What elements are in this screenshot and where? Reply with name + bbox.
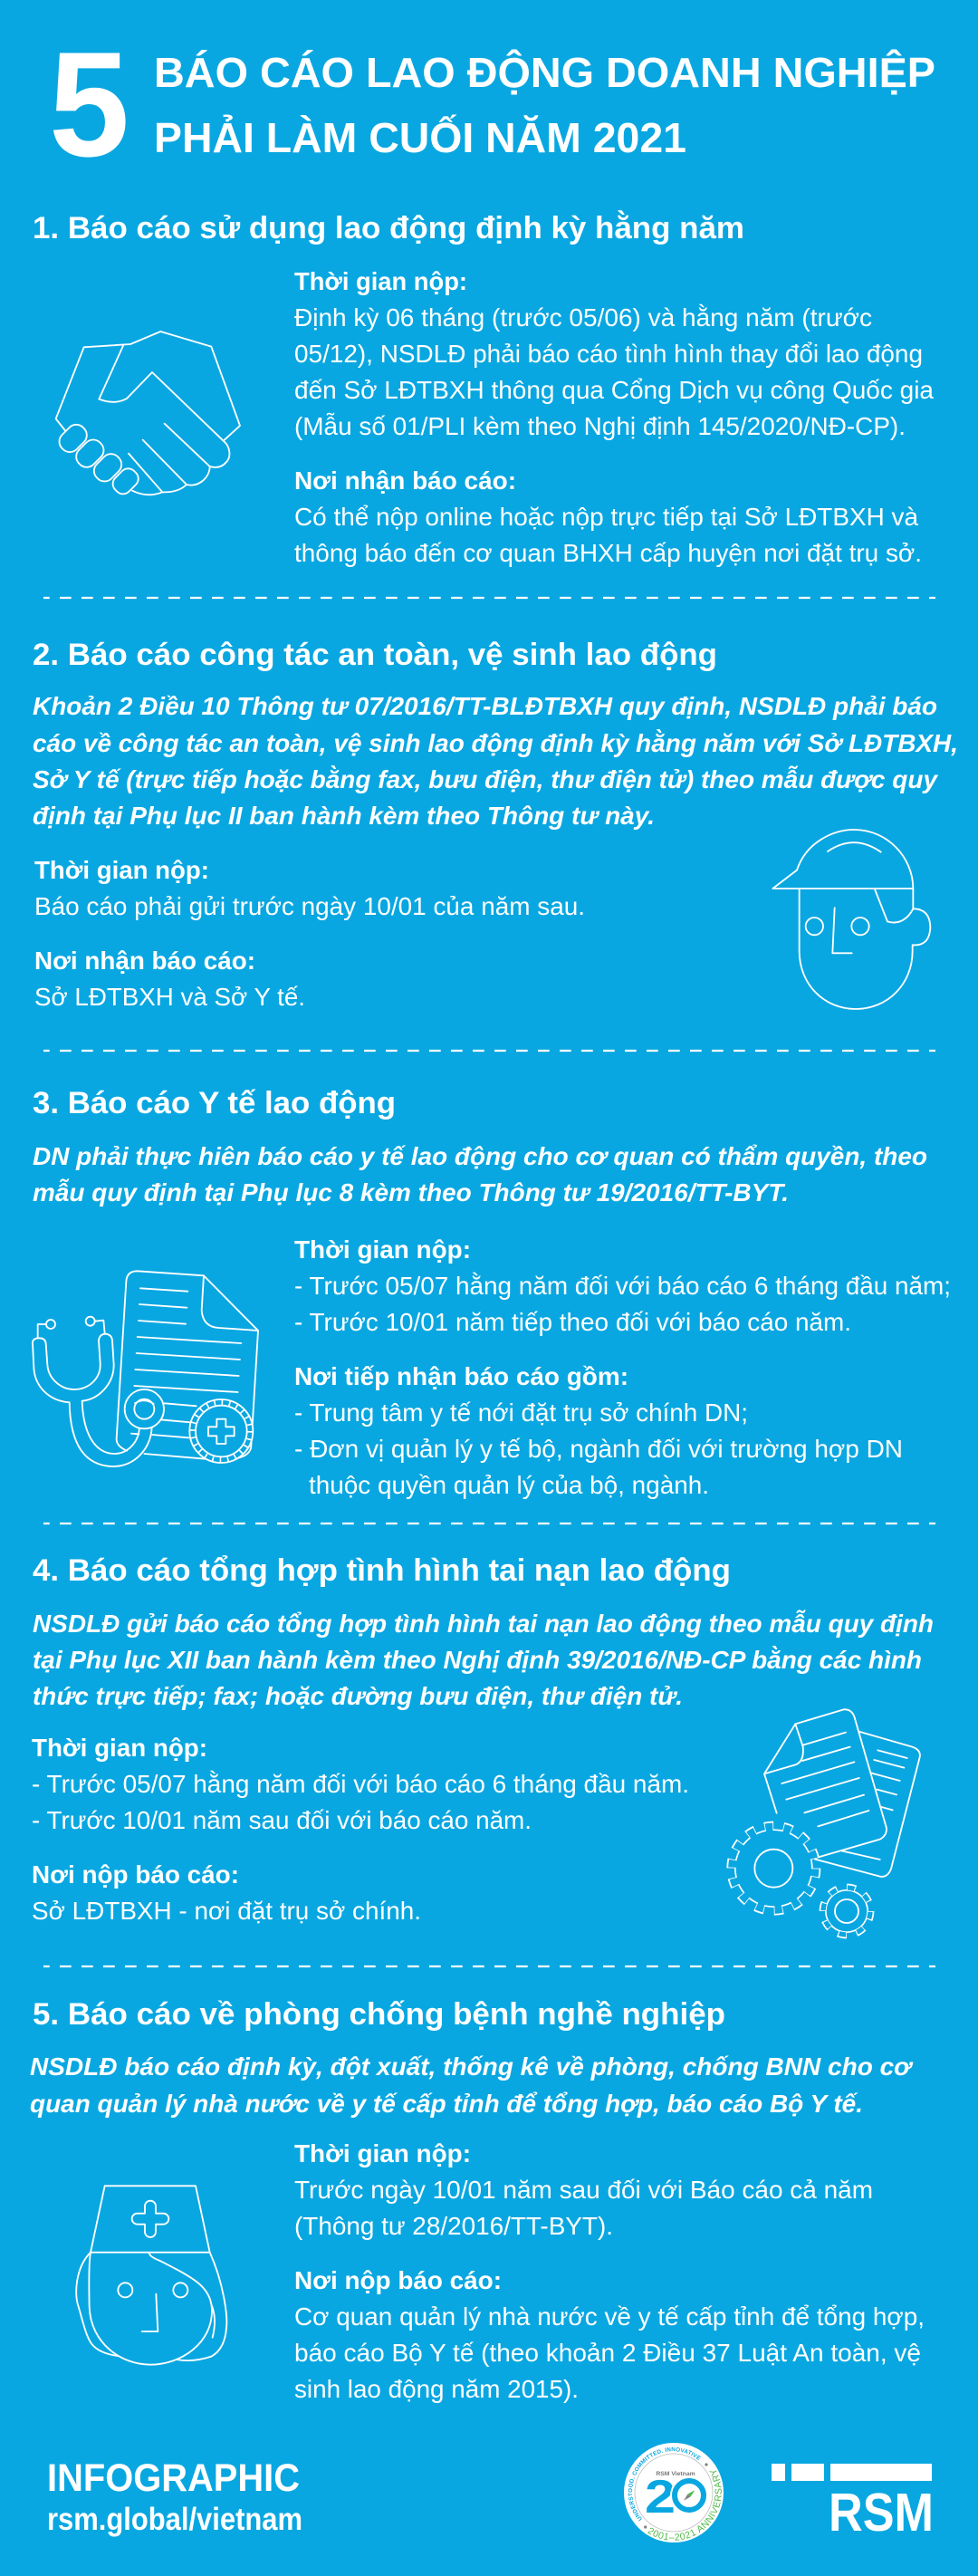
text: submission time: - Trước 05/07 hằng năm đối với báo cáo 6 tháng đầu năm. xyxy=(32,1770,689,1798)
text: recipients: Nơi tiếp nhận báo cáo gồm: xyxy=(294,1362,628,1390)
text: submission time xyxy=(294,2139,873,2240)
panel: section 2 xyxy=(33,638,958,1011)
footer label: rsm.global/vietnam xyxy=(47,2502,302,2537)
intro text 4: NSDLĐ gửi báo cáo tổng hợp tình hình tai nạn lao động theo mẫu quy định xyxy=(33,1610,934,1638)
intro text 4: tại Phụ lục XII ban hành kèm theo Nghị định 39/2016/NĐ-CP bằng các hình xyxy=(33,1646,922,1674)
text: submission time xyxy=(32,1734,689,1834)
text: recipient: Sở LĐTBXH - nơi đặt trụ sở chính. xyxy=(32,1897,421,1925)
icon: worker with helmet xyxy=(772,830,930,1009)
intro text 5 xyxy=(30,2052,914,2118)
text: recipient: Nơi nộp báo cáo: xyxy=(294,2266,502,2294)
anniversary badge: UNDERSTOOD. COMMITTED. INNOVATIVE xyxy=(628,2447,701,2522)
text: submission time: Thời gian nộp: xyxy=(294,1235,471,1264)
anniversary badge: 2001–2021 ANNIVERSARY xyxy=(647,2471,722,2541)
heading 4: 4. Báo cáo tổng hợp tình hình tai nạn lao động xyxy=(33,1553,731,1588)
footer xyxy=(47,2443,934,2542)
text: submission time: (Thông tư 28/2016/TT-BYT). xyxy=(294,2212,613,2240)
text: submission time xyxy=(34,856,585,920)
intro text 3: DN phải thực hiên báo cáo y tế lao động cho cơ quan có thẩm quyền, theo xyxy=(33,1142,927,1170)
text: submission time: - Trước 10/01 năm tiếp theo đối với báo cáo năm. xyxy=(294,1308,851,1336)
text: submission time: Thời gian nộp: xyxy=(294,267,467,295)
anniversary badge xyxy=(624,2443,724,2542)
text: recipients: - Đơn vị quản lý y tế bộ, ngành đối với trường hợp DN xyxy=(294,1435,903,1463)
text: recipients xyxy=(294,1362,903,1499)
intro text 2: Sở Y tế (trực tiếp hoặc bằng fax, bưu điện, thư điện tử) theo mẫu được quy xyxy=(33,765,938,793)
icon: stethoscope and document xyxy=(33,1271,258,1466)
panel: section 5 xyxy=(30,1997,925,2403)
text: recipient: Nơi nhận báo cáo: xyxy=(294,466,516,495)
panel: section 1 xyxy=(33,211,934,567)
heading 3: 3. Báo cáo Y tế lao động xyxy=(33,1086,396,1120)
intro text 5: quan quản lý nhà nước về y tế cấp tỉnh để tổng hợp, báo cáo Bộ Y tế. xyxy=(30,2090,863,2118)
text: recipient: Cơ quan quản lý nhà nước về y tế cấp tỉnh để tổng hợp, xyxy=(294,2302,925,2331)
icon: handshake xyxy=(55,332,240,497)
text: submission time: Thời gian nộp: xyxy=(32,1734,207,1762)
text: recipient: thông báo đến cơ quan BHXH cấp huyện nơi đặt trụ sở. xyxy=(294,539,922,567)
big number 5: 5 xyxy=(49,21,129,187)
text: submission time: Thời gian nộp: xyxy=(294,2139,471,2167)
anniversary badge: RSM Vietnam xyxy=(656,2471,695,2477)
text: recipients: thuộc quyền quản lý của bộ, ngành. xyxy=(309,1471,709,1499)
footer label xyxy=(47,2456,302,2537)
title text: BÁO CÁO LAO ĐỘNG DOANH NGHIỆP xyxy=(154,49,935,96)
intro text 4: thức trực tiếp; fax; hoặc đường bưu điện, thư điện tử. xyxy=(33,1682,683,1710)
anniversary badge: 20 xyxy=(645,2471,706,2523)
text: submission time: Thời gian nộp: xyxy=(34,856,209,884)
text: recipient: Có thể nộp online hoặc nộp trực tiếp tại Sở LĐTBXH và xyxy=(294,503,918,531)
text: recipient xyxy=(34,947,305,1011)
intro text 2: định tại Phụ lục II ban hành kèm theo Thông tư này. xyxy=(33,802,655,830)
text: submission time: Định kỳ 06 tháng (trước 05/06) và hằng năm (trước xyxy=(294,303,872,332)
intro text 3: mẫu quy định tại Phụ lục 8 kèm theo Thông tư 19/2016/TT-BYT. xyxy=(33,1178,789,1206)
text: recipient: Nơi nhận báo cáo: xyxy=(34,947,255,975)
intro text 2 xyxy=(33,692,958,830)
text: recipient: Nơi nộp báo cáo: xyxy=(32,1860,239,1889)
intro text 2: Khoản 2 Điều 10 Thông tư 07/2016/TT-BLĐTBXH quy định, NSDLĐ phải báo xyxy=(33,692,937,720)
icon: nurse xyxy=(76,2186,226,2365)
text: submission time: Trước ngày 10/01 năm sau đối với Báo cáo cả năm xyxy=(294,2176,873,2204)
panel: section 4 xyxy=(32,1553,934,1936)
intro text 3 xyxy=(33,1142,927,1206)
title xyxy=(49,21,935,187)
text: submission time: đến Sở LĐTBXH thông qua Cổng Dịch vụ công Quốc gia xyxy=(294,376,934,404)
text: submission time xyxy=(294,267,934,440)
title text: PHẢI LÀM CUỐI NĂM 2021 xyxy=(154,114,686,161)
intro text 5: NSDLĐ báo cáo định kỳ, đột xuất, thống kê về phòng, chống BNN cho cơ xyxy=(30,2052,914,2081)
text: recipient xyxy=(32,1860,421,1925)
panel: section 3 xyxy=(33,1086,951,1499)
text: recipients: - Trung tâm y tế nới đặt trụ sở chính DN; xyxy=(294,1399,748,1427)
heading 1: 1. Báo cáo sử dụng lao động định kỳ hằng năm xyxy=(33,211,744,245)
text: recipient: sinh lao động năm 2015). xyxy=(294,2375,579,2403)
RSM logo xyxy=(772,2464,934,2542)
text: submission time: - Trước 10/01 năm sau đối với báo cáo năm. xyxy=(32,1806,532,1834)
title text xyxy=(154,49,935,161)
text: recipient xyxy=(294,2266,925,2403)
intro text 2: cáo về công tác an toàn, vệ sinh lao động định kỳ hằng năm với Sở LĐTBXH, xyxy=(33,729,958,757)
text: submission time: Báo cáo phải gửi trước ngày 10/01 của năm sau. xyxy=(34,892,585,920)
heading 2: 2. Báo cáo công tác an toàn, vệ sinh lao động xyxy=(33,638,717,672)
text: submission time xyxy=(294,1235,951,1336)
RSM logo: RSM xyxy=(829,2483,934,2542)
intro text 4 xyxy=(33,1610,934,1710)
text: recipient xyxy=(294,466,922,567)
text: recipient: báo cáo Bộ Y tế (theo khoản 2 Điều 37 Luật An toàn, vệ xyxy=(294,2339,921,2367)
text: submission time: - Trước 05/07 hằng năm đối với báo cáo 6 tháng đầu năm; xyxy=(294,1272,951,1300)
icon: documents and gears xyxy=(731,1709,920,1936)
text: recipient: Sở LĐTBXH và Sở Y tế. xyxy=(34,983,305,1011)
heading 5: 5. Báo cáo về phòng chống bệnh nghề nghiệp xyxy=(33,1997,725,2032)
text: submission time: (Mẫu số 01/PLI kèm theo Nghị định 145/2020/NĐ-CP). xyxy=(294,412,906,440)
text: submission time: 05/12), NSDLĐ phải báo cáo tình hình thay đổi lao động xyxy=(294,340,923,368)
footer label: INFOGRAPHIC xyxy=(47,2456,300,2500)
